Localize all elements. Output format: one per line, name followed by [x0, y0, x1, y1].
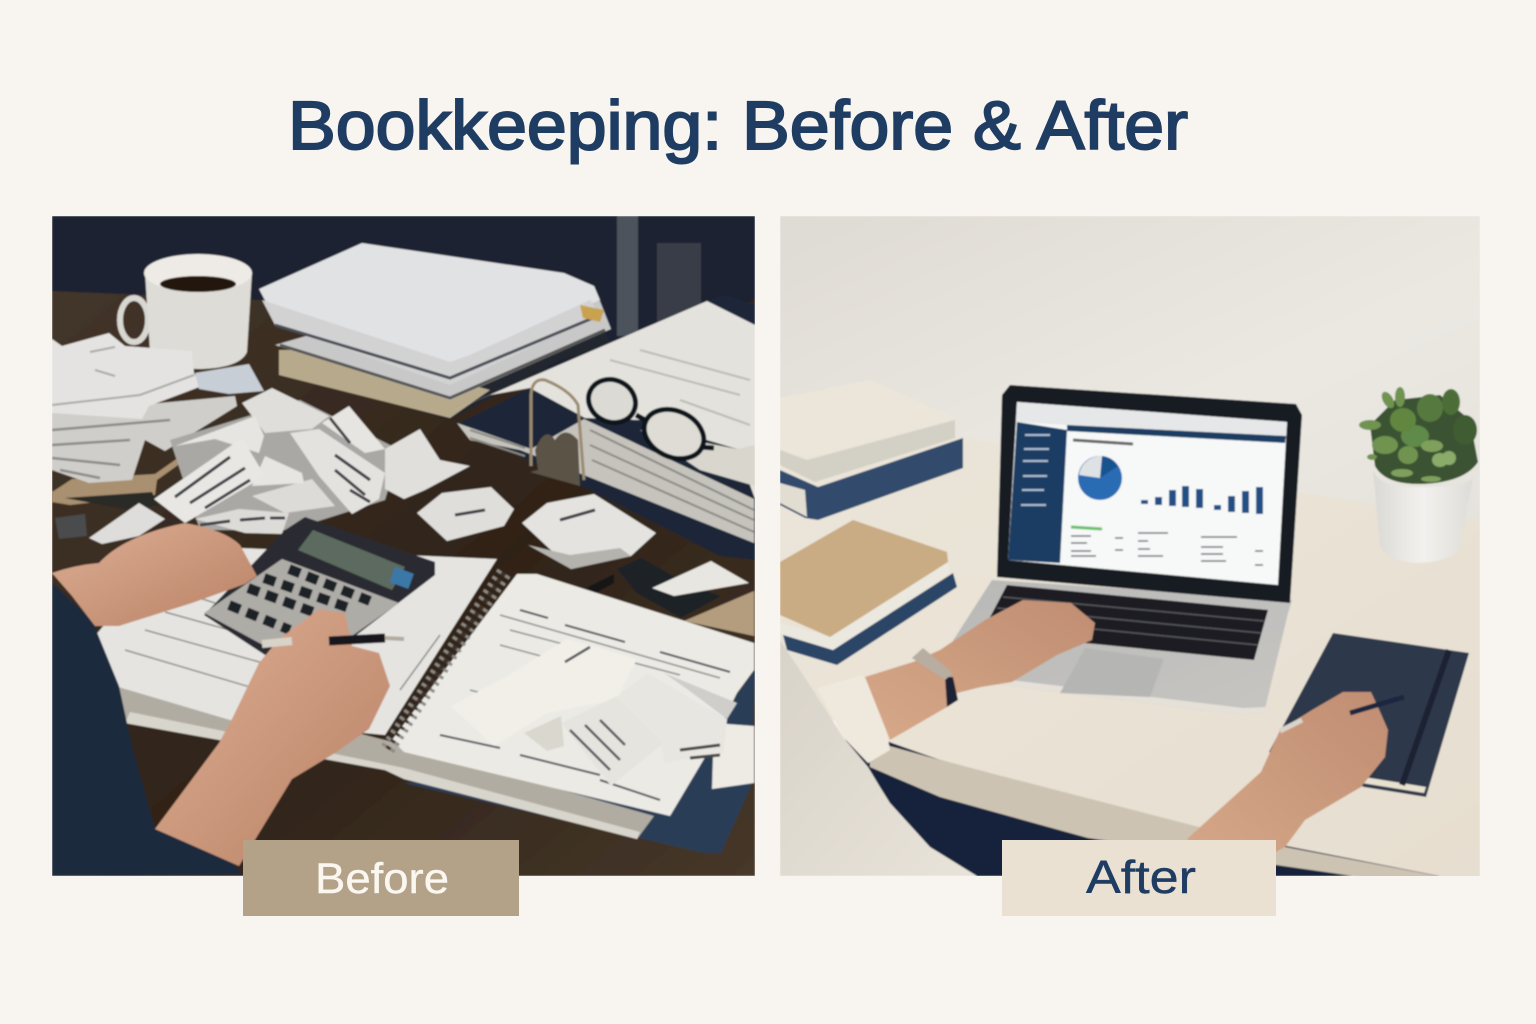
panel: after photo	[780, 216, 1480, 884]
wooden desk	[52, 291, 755, 876]
right hand and arm	[155, 609, 390, 866]
scattered receipts	[55, 364, 656, 569]
plant	[1359, 387, 1478, 563]
label: after: After	[1086, 851, 1196, 903]
pie chart	[1078, 456, 1122, 500]
screen	[1008, 402, 1287, 585]
laptop lid	[997, 385, 1302, 603]
glasses	[585, 376, 715, 462]
panel: before photo	[40, 216, 755, 876]
tan book stack	[780, 520, 957, 665]
left receipts pile	[40, 333, 237, 510]
coffee mug	[120, 254, 252, 369]
desk front edge	[868, 744, 1441, 876]
dark area under desk	[780, 740, 1480, 876]
calculator	[204, 517, 435, 655]
trackpad	[1060, 648, 1164, 697]
dashboard tables	[1071, 527, 1263, 565]
laptop base	[947, 580, 1292, 715]
keyboard	[987, 585, 1268, 660]
dashboard sidebar	[1008, 422, 1067, 563]
right arm with pen	[1180, 692, 1404, 876]
label: before	[243, 840, 519, 916]
ledger and notebook	[95, 545, 754, 839]
browser chrome	[1016, 402, 1287, 438]
dark folder	[404, 670, 755, 853]
receipts on notebook	[451, 639, 754, 789]
notebook handwriting	[440, 610, 730, 800]
person shirt	[780, 640, 977, 876]
wall	[780, 216, 1480, 536]
notebook	[1269, 633, 1469, 797]
sleeve cuff	[817, 675, 890, 763]
desk	[780, 450, 1480, 876]
title: Bookkeeping: Before & After	[288, 87, 1188, 164]
left sleeve	[52, 583, 242, 876]
spiral binding	[385, 573, 504, 753]
left arm on laptop	[865, 600, 1095, 740]
binder with pages	[450, 295, 755, 560]
navy top bar	[1067, 425, 1286, 443]
receipt print marks	[175, 418, 595, 525]
stacked books, top left	[780, 420, 964, 521]
ring clip	[531, 380, 584, 480]
dark background wall	[52, 216, 755, 376]
left hand	[52, 523, 257, 626]
small objects on desk	[586, 558, 754, 636]
laptop	[947, 385, 1302, 715]
label: before: Before	[315, 855, 449, 903]
pen	[262, 638, 404, 644]
wristwatch	[912, 648, 958, 707]
paper stack, top	[259, 243, 611, 420]
label: after	[1002, 840, 1276, 916]
dashboard heading	[1073, 440, 1133, 444]
bar charts	[1141, 486, 1263, 514]
